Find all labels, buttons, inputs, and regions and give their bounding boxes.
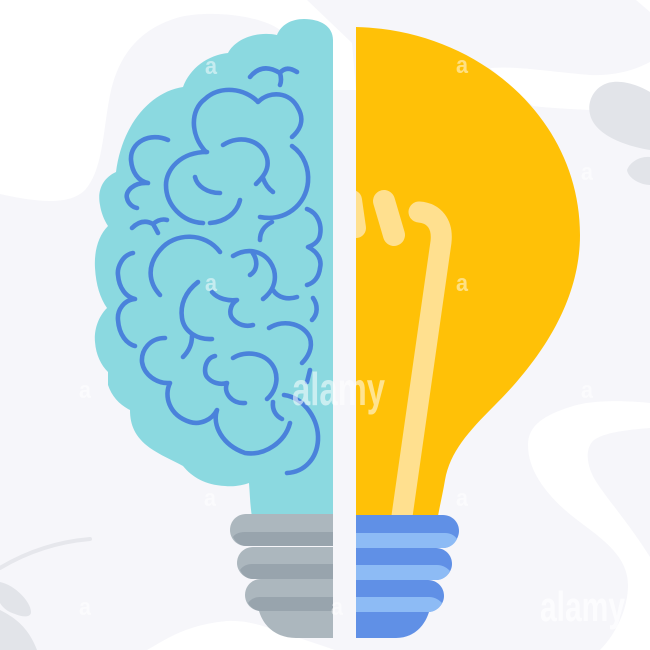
decorative leaf: bottom left lower xyxy=(0,610,37,650)
watermark: small letter marks: a xyxy=(331,594,344,621)
light bulb half xyxy=(334,27,580,516)
decorative stem: bottom left xyxy=(0,539,90,568)
bulb glass xyxy=(356,27,580,516)
watermark: small letter marks: a xyxy=(456,52,469,79)
watermark: small letter marks: a xyxy=(456,485,469,512)
watermark: small letter marks: a xyxy=(204,485,217,512)
brain silhouette xyxy=(95,19,333,517)
blue screw base (right) xyxy=(356,515,459,638)
watermark: small letter marks: a xyxy=(205,270,218,297)
watermark: small letter marks: a xyxy=(581,159,594,186)
watermark: small letter marks: a xyxy=(79,594,92,621)
brain folds xyxy=(118,68,320,473)
decorative leaf: top right xyxy=(589,82,650,150)
watermark: small letter marks xyxy=(79,52,594,621)
decorative leaf: right small xyxy=(627,157,650,185)
grey screw base (left) xyxy=(230,514,333,638)
watermark: small letter marks: a xyxy=(205,53,218,80)
brain half xyxy=(95,19,333,517)
filament xyxy=(352,200,441,516)
gap cover xyxy=(334,180,356,250)
decorative leaf: bottom left upper xyxy=(0,582,31,616)
watermark: small letter marks: a xyxy=(456,270,469,297)
watermark: small letter marks: a xyxy=(581,377,594,404)
watermark: small letter marks: a xyxy=(79,377,92,404)
watermark: alamy centre: alamy xyxy=(292,363,385,415)
